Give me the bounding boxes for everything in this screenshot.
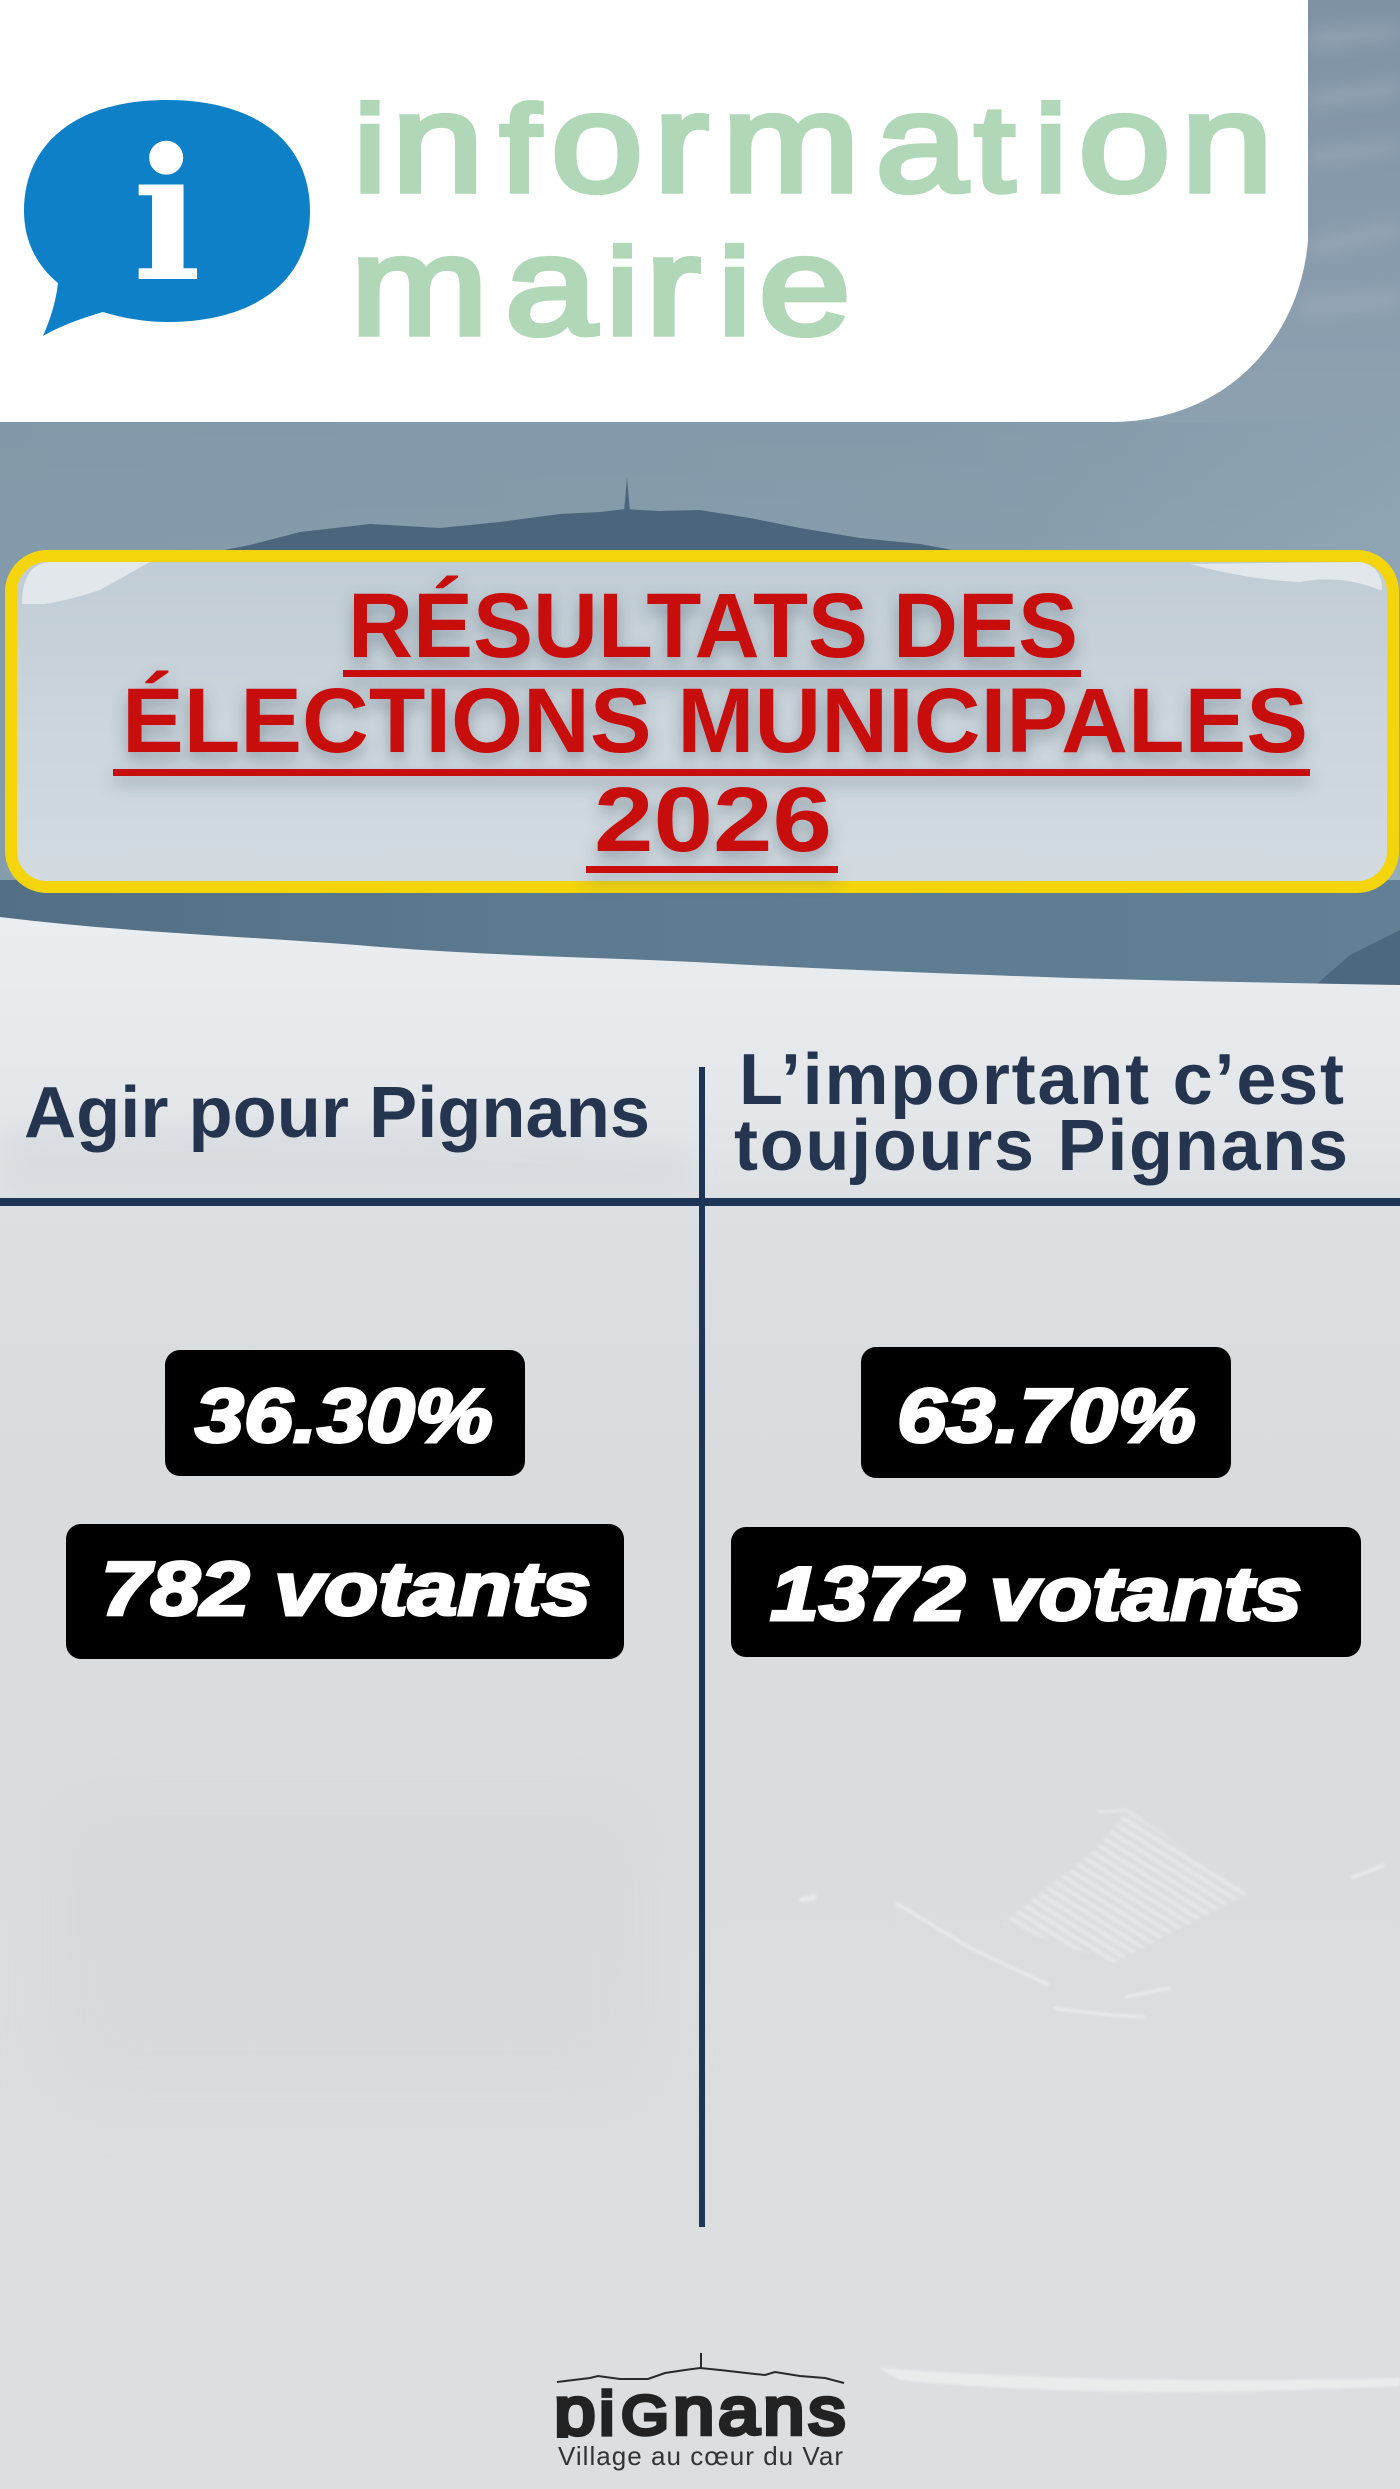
- result: 36.30%: 36.30%: [195, 1374, 493, 1459]
- background: faded village lower panel: [0, 917, 1400, 2489]
- column heading: L'important c'est toujours Pignans: L’important c’est: [739, 1040, 1344, 1120]
- result: 782 votants: 782 votants: [101, 1547, 591, 1632]
- header panel: [0, 0, 1308, 422]
- result: 63.70%: 63.70%: [897, 1374, 1196, 1459]
- result: 1372 votants: 1372 votants: [770, 1552, 1302, 1637]
- result: 782 votants: [66, 1524, 624, 1659]
- column heading: Agir pour Pignans: Agir pour Pignans: [24, 1073, 650, 1153]
- logo: Pignans: Village au cœur du Var: [558, 2441, 843, 2471]
- title text: RÉSULTATS DES: [348, 574, 1078, 677]
- title panel: yellow frame: [11, 556, 1393, 887]
- result: 36.30%: [165, 1350, 525, 1476]
- result: 1372 votants: [731, 1527, 1361, 1657]
- aerial stadium detail: [800, 1810, 1385, 2017]
- column heading: L'important c'est toujours Pignans: [734, 1040, 1348, 1186]
- title text: 2026: [594, 769, 832, 871]
- logo: Pignans: [554, 2353, 845, 2471]
- result: 63.70%: [861, 1347, 1231, 1478]
- logo: Pignans: piGnans: [554, 2373, 845, 2448]
- results table lines: [0, 1067, 1400, 2227]
- icon: information speech bubble: i: [132, 108, 202, 322]
- hill with tower: [214, 477, 964, 552]
- title text: [113, 574, 1310, 873]
- heading: information: information: [354, 65, 1273, 221]
- icon: information speech bubble: [24, 100, 310, 336]
- column heading: L'important c'est toujours Pignans: toujours Pignans: [734, 1106, 1348, 1186]
- title text: ÉLECTIONS MUNICIPALES: [122, 669, 1308, 772]
- background: sky and mountain photo: [0, 0, 1400, 1000]
- heading: mairie: mairie: [350, 208, 851, 364]
